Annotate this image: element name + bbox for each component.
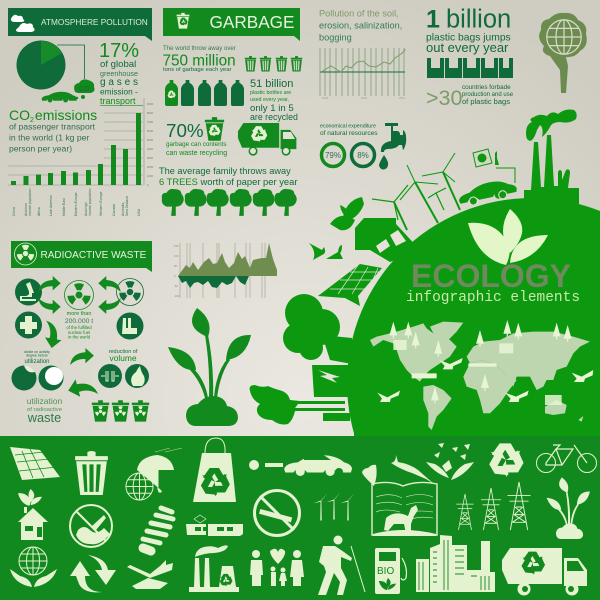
icon: car with CO cloud: [42, 79, 94, 102]
bar chart: CO2 emissions by region: 2000: [147, 165, 154, 169]
icon: electric car: [457, 168, 518, 208]
text: over 30 countries: [426, 84, 514, 110]
icon: microscope circle: [15, 278, 42, 306]
bar chart: CO2 emissions by region: income population: [88, 188, 92, 216]
icon: bio fuel pump: [375, 548, 406, 594]
bar chart: CO2 emissions by region: 5000: [147, 138, 154, 142]
arrows: flow: [38, 276, 121, 401]
bar chart: CO2 emissions by region: 1000: [147, 174, 154, 178]
world map: [370, 322, 590, 430]
text: 750 million tons: The world throw away over: [163, 45, 236, 52]
icon: radiation centre: [64, 280, 94, 310]
text: divide on activity: [24, 350, 50, 365]
text: 51 billion plastic bottles: 51 billion: [250, 78, 293, 90]
icon: white leaves: [468, 209, 548, 265]
donut: 79%: 79%: [325, 151, 341, 160]
text: 70% garbage recycling: garbage can contents: [166, 141, 227, 148]
text: 6 trees of paper: 6 TREES worth of paper per year: [159, 176, 297, 187]
text: pollution of the soil: erosion, salinization,: [319, 20, 402, 30]
icon: tram: [186, 515, 243, 536]
icon: house: [355, 218, 420, 262]
text: CO2 emissions: emissions: [35, 107, 97, 123]
icons: wind turbines: [372, 153, 460, 230]
bar chart: CO2 emissions by region: 9000: [147, 102, 154, 106]
text: 750 million tons: [162, 45, 236, 73]
bar chart: CO2 emissions by region: Western Europe: [99, 191, 103, 216]
icon: hiker: [318, 536, 365, 595]
area chart: pollution fluctuation: 150: [174, 244, 179, 248]
subtitle: infographic elements: infographic elements: [406, 290, 580, 306]
text: 1 billion plastic bags: out every year: [426, 40, 509, 55]
bar chart: CO2 emissions by region: income population: [28, 188, 32, 216]
icon: city buildings: [416, 535, 495, 592]
icon: factory recycling: [189, 545, 239, 592]
text: 51 billion plastic bottles: plastic bottles are: [250, 90, 291, 96]
map markers: trees, pylons and tankers: [377, 320, 593, 405]
icon: bio fuel pump: BIO: [377, 566, 394, 577]
text: more than 200.000 t: in the world: [68, 334, 91, 340]
icon: big tree: [283, 294, 352, 364]
text: more than 200.000 t: 200.000 t: [65, 318, 93, 325]
bar chart: CO2 emissions by region: Asia low: [24, 203, 28, 216]
text: 17% of global greenhouse gases: gases: [100, 77, 138, 88]
icon: wall socket and plug: [473, 149, 499, 167]
globe: [347, 198, 600, 568]
illustration: green plant: [168, 308, 251, 426]
icon: umbrella and globe: [126, 448, 182, 500]
text: utilization of radioactive waste: utilization: [27, 396, 62, 406]
text: utilization of radioactive waste: of radioactive: [27, 407, 63, 413]
text: 1 billion plastic bags: 1: [426, 6, 440, 34]
panel: garbage: [159, 8, 302, 216]
icon row: radioactive bins: [92, 400, 149, 422]
icon: small birds: [309, 243, 343, 260]
text: over 30 countries: countries forbade: [462, 84, 511, 91]
band background: [0, 436, 600, 600]
icon row: plastic bottles: [165, 80, 244, 106]
icon: book with deer: [372, 482, 437, 536]
line chart: soil: 2004: [361, 96, 368, 100]
text: reduction of volume: [109, 349, 138, 363]
icon: solar panel: [10, 447, 60, 480]
text: 750 million tons: tons of garbage each year: [163, 67, 231, 73]
text: divide on activity: degree before: [26, 354, 48, 358]
text: reduction of volume: volume: [110, 353, 137, 363]
area chart: pollution fluctuation: 50: [174, 264, 177, 268]
bar chart: CO2 emissions by region: Australia,: [121, 202, 125, 216]
icon: water tap: [379, 123, 406, 170]
icon: house with leaves: [18, 489, 48, 540]
icon: recycling bin: [205, 117, 224, 141]
banner: garbage: GARBAGE: [210, 12, 295, 32]
text: 70% garbage recycling: can waste recycling: [166, 150, 227, 157]
icon: factory with smoke: [524, 110, 579, 205]
text: 51 billion plastic bottles: used every year,: [250, 97, 289, 103]
text: 1 billion plastic bags: plastic bags jumps: [426, 32, 511, 44]
icon: green leaves: [330, 197, 364, 230]
text: more than 200.000 t: nuclear fuel: [68, 330, 90, 335]
banner: garbage: [163, 8, 300, 41]
text: pollution of the soil: Pollution of the soil,: [319, 8, 399, 18]
bar chart: CO2 emissions by region: New Zealand: [125, 196, 129, 216]
panel: natural resources: [320, 123, 406, 170]
bar chart: CO2 emissions by region: 4000: [147, 147, 154, 151]
icon: wind turbines: [313, 492, 356, 520]
text: economical expenditure: [320, 124, 378, 137]
icon row: plastic bags: [427, 58, 513, 78]
text: utilization of radioactive waste: [27, 396, 63, 425]
icon: recycling truck: [238, 123, 296, 156]
line chart: soil: [320, 48, 406, 100]
text: CO2 emissions: in the world (1 kg per: [9, 132, 89, 142]
text: pollution of the soil: bogging: [319, 32, 352, 42]
icon: hands with butterflies: [426, 443, 474, 480]
bar chart: CO2 emissions by region: Eastern Europe: [74, 192, 78, 216]
icon: family: [250, 549, 304, 586]
text: CO2 emissions: person per year): [9, 144, 72, 154]
text: 1 billion plastic bags: billion: [446, 6, 511, 34]
icon: factory circle: [116, 312, 144, 340]
text: 750 million tons: 750 million: [162, 52, 236, 70]
text: reduction of volume: reduction of: [109, 349, 138, 355]
icon: recycle arrows: [70, 555, 116, 592]
area chart: pollution fluctuation: -100: [174, 294, 180, 298]
text: CO2 emissions: of passenger transport: [9, 122, 96, 132]
text: 6 trees of paper: [159, 166, 297, 187]
text: more than 200.000 t: of the fulfilled: [66, 325, 92, 330]
text: over 30 countries: of plastic bags: [462, 97, 510, 106]
area chart: pollution fluctuation: 0: [174, 274, 176, 278]
icon: car exhaust cloud: [250, 385, 345, 424]
text: divide on activity: utilization: [24, 359, 50, 365]
icon: solar panel: [318, 264, 382, 306]
text: 51 billion plastic bottles: [250, 78, 298, 122]
icon: butterfly: [362, 465, 377, 486]
text: pollution of the soil: [319, 8, 402, 42]
donut: 8%: 8%: [357, 151, 369, 160]
icon: no pollution: [70, 505, 112, 547]
bar chart: CO2 emissions by region: Middle East: [62, 198, 66, 216]
panel: soil pollution: [319, 8, 406, 100]
bar chart: CO2 emissions by region: USA: [137, 208, 141, 216]
icon: globe tree: [539, 13, 587, 93]
icon row: trash cans: [245, 56, 302, 71]
bar chart: CO2 emissions by region: 3000: [147, 156, 154, 160]
text: CO2 emissions: CO: [9, 107, 30, 123]
icon: radiation ring: [116, 278, 144, 306]
text: more than 200.000 t: [65, 311, 93, 340]
text: over 30 countries: production and use: [462, 92, 514, 98]
bar chart: CO2 emissions by region: [8, 98, 154, 216]
text: economical expenditure: of natural resources: [320, 130, 378, 137]
bar chart: CO2 emissions by region: 7000: [147, 120, 154, 124]
area chart: pollution fluctuation: 100: [174, 254, 179, 258]
icon: energy saving bulb: [143, 508, 173, 551]
bar chart: CO2 emissions by region: Canada: [112, 204, 116, 216]
bar chart: CO2 emissions by region: Africa: [37, 207, 41, 216]
icon: car with CO cloud: CO: [79, 86, 90, 93]
icon: moon circles: [12, 365, 64, 390]
text: over 30 countries: >30: [426, 86, 463, 110]
bar chart: CO2 emissions by region: Latin America: [49, 195, 53, 216]
bar chart: CO2 emissions by region: Asia high: [84, 202, 88, 216]
icon: socket and electric car: [246, 454, 352, 476]
text: 51 billion plastic bottles: only 1 in 5: [250, 103, 294, 114]
bar chart: CO2 emissions by region: 8000: [147, 111, 154, 115]
icon: shopping bag with recycle: [193, 438, 236, 502]
panel: green icon band: [0, 430, 600, 600]
banner: radioactive waste: [11, 241, 152, 272]
text: more than 200.000 t: more than: [67, 311, 91, 317]
icon: recycling truck: [502, 548, 587, 596]
text: divide on activity: divide on activity: [24, 350, 50, 354]
icon: plant: [547, 477, 590, 539]
bar chart: CO2 emissions by region: China: [12, 207, 16, 216]
text: economical expenditure: economical expenditure: [320, 124, 376, 130]
pie chart: 17% transport: [16, 40, 84, 90]
icon: globe in hands: [10, 547, 57, 587]
icon: medical cross: [15, 312, 42, 338]
text: 1 billion plastic bags: [426, 6, 511, 55]
panel: plastic bags: [426, 6, 587, 110]
text: 17% of global greenhouse gases: [99, 40, 143, 106]
bar chart: CO2 emissions by region: 6000: [147, 129, 154, 133]
line chart: soil: 1994: [322, 96, 329, 100]
text: 17% of global greenhouse gases: transport: [100, 96, 136, 106]
panel: radioactive waste: [11, 241, 152, 425]
text: 17% of global greenhouse gases: greenhouse: [100, 69, 138, 78]
banner: atmosphere pollution: ATMOSPHERE POLLUTION: [41, 17, 148, 27]
icon: trash can: [75, 451, 108, 495]
text: 70% garbage recycling: [166, 120, 227, 157]
text: 6 trees of paper: The average family throws away: [159, 166, 291, 176]
banner: radioactive waste: RADIOACTIVE WASTE: [40, 250, 147, 261]
icon row: trees: [162, 189, 297, 216]
area chart: pollution fluctuation: -50: [174, 284, 178, 288]
panel: atmosphere pollution: [8, 8, 154, 216]
bar chart: CO2 emissions by region: 0: [147, 183, 149, 187]
text: 17% of global greenhouse gases: of global: [100, 59, 136, 70]
banner: atmosphere pollution: [8, 8, 152, 41]
icon: power pylons: [456, 482, 531, 530]
area chart: pollution fluctuation: [174, 243, 277, 298]
icon: power bolt building: [312, 365, 350, 421]
icon: compress and burn circles: [98, 364, 149, 388]
text: CO2 emissions: 2: [30, 117, 34, 124]
illustration: ecology globe scene: [250, 110, 600, 568]
icon: no smoking: [254, 490, 300, 536]
text: 17% of global greenhouse gases: 17%: [99, 40, 139, 62]
text: 17% of global greenhouse gases: emission -: [100, 86, 138, 96]
icon: recycle symbol: [484, 443, 528, 481]
text: utilization of radioactive waste: waste: [27, 410, 61, 425]
icon: oil tanker spill: [127, 560, 173, 589]
text: 70% garbage recycling: 70%: [166, 120, 204, 141]
icon: gazelle: [391, 455, 434, 484]
icon: bicycle: [536, 445, 596, 472]
text: 51 billion plastic bottles: are recycled: [250, 112, 298, 122]
title: ECOLOGY: ECOLOGY: [411, 258, 571, 294]
line chart: soil: 2014: [399, 96, 406, 100]
text: CO2 emissions: [9, 107, 97, 154]
